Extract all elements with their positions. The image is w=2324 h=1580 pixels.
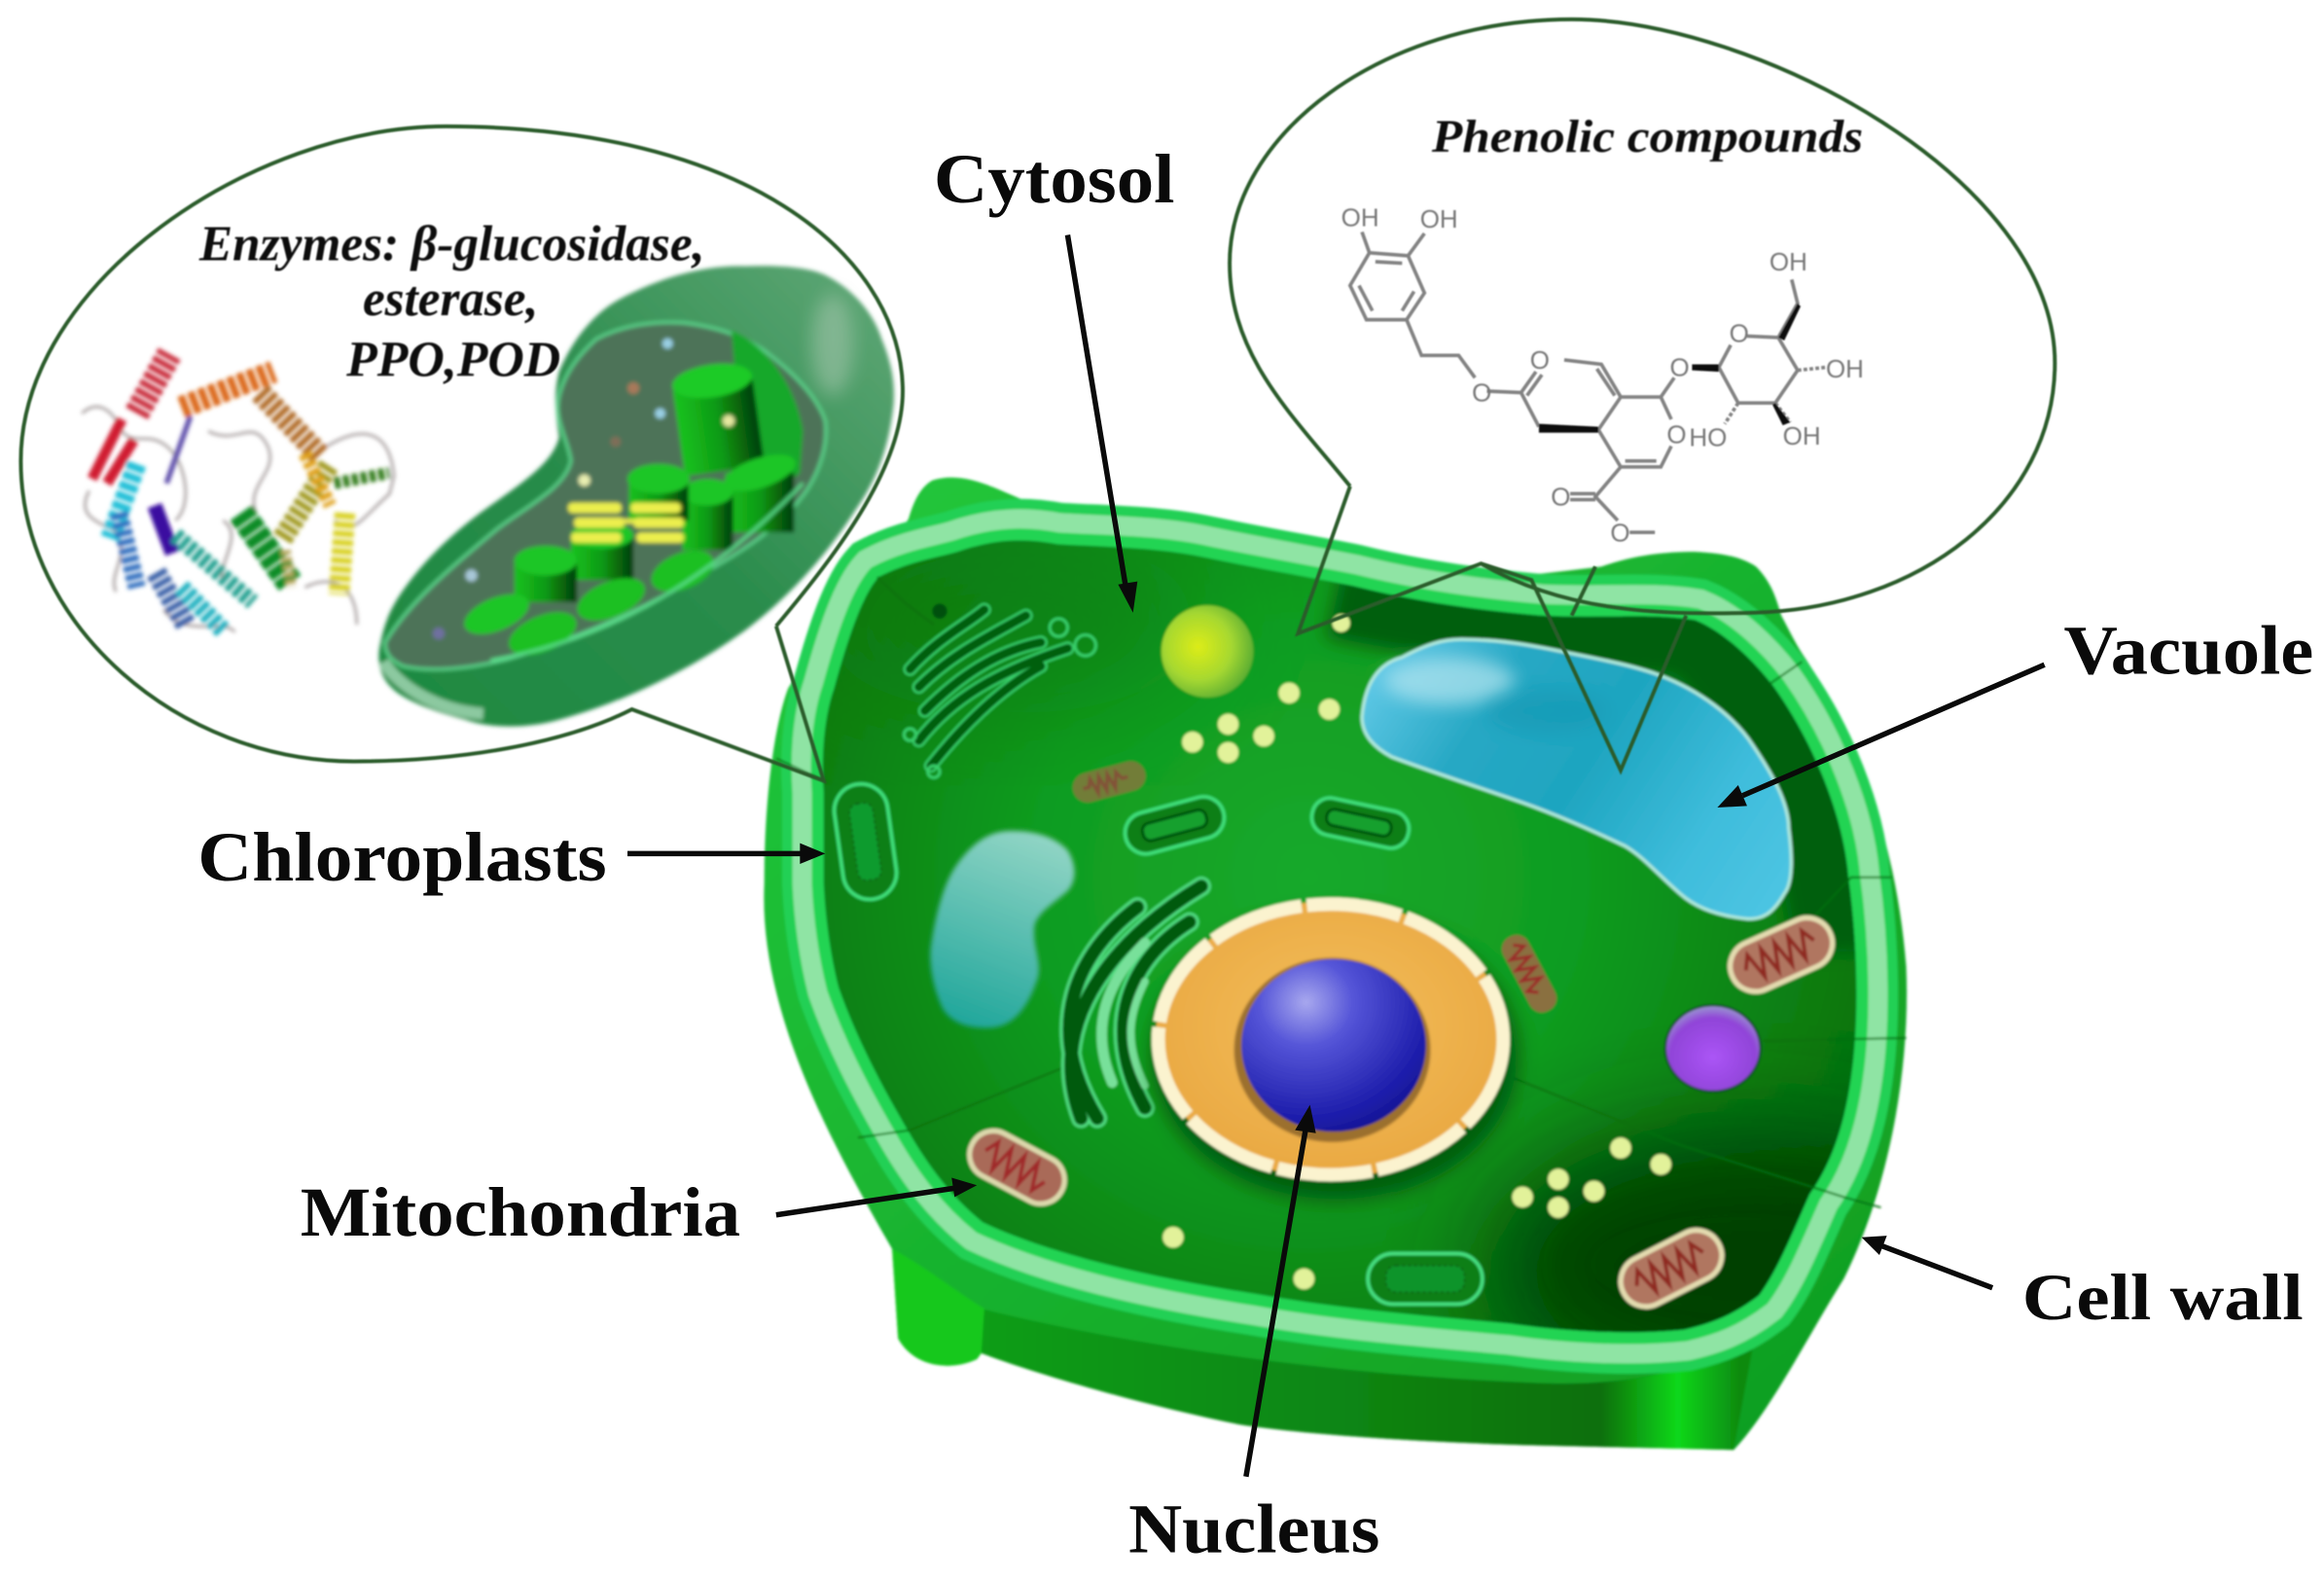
phenolic molecule structure (1341, 202, 1864, 547)
cytoplasm (823, 541, 1856, 1332)
molecule atom labels: O (1530, 345, 1550, 375)
molecule atom labels: OH (1420, 204, 1458, 233)
molecule atom labels: O (1669, 353, 1690, 382)
arrow: Nucleus (1246, 1105, 1316, 1477)
enzymes caption: PPO,POD (345, 333, 560, 388)
phenolic compounds caption: Phenolic compounds (1431, 112, 1863, 162)
chloroplast organelles (831, 780, 1483, 1304)
arrow: Chloroplasts (627, 844, 825, 864)
molecule atom labels: O (1610, 518, 1630, 547)
chloroplast bottom (1368, 1254, 1483, 1304)
helix olive (282, 464, 330, 538)
sheet red (92, 419, 134, 484)
large vacuole (1362, 639, 1791, 919)
chloroplast envelope (378, 266, 894, 727)
yellow thylakoid connections (568, 503, 684, 543)
wall division lines (776, 577, 1906, 1207)
molecule atom labels: O (1551, 483, 1570, 512)
chloroplast highlight (812, 295, 853, 396)
molecule atom labels (1341, 202, 1864, 547)
cytoplasm shading (818, 535, 1992, 1398)
cell wall band pale (823, 541, 1856, 1332)
helix turquoise (181, 588, 223, 630)
nucleus (1151, 901, 1520, 1202)
purple vesicle (1665, 1005, 1761, 1092)
mitochondrion upper left (1069, 758, 1149, 806)
helix dark green (241, 513, 290, 583)
arrow: Cytosol (1067, 234, 1137, 613)
molecule atom labels: OH (1783, 421, 1821, 450)
left foot of cell wall (892, 1249, 984, 1366)
chloroplast pale lower rim (383, 662, 483, 714)
helix cyan (110, 464, 137, 538)
helix teal blue (156, 572, 186, 625)
helix orange (181, 372, 273, 408)
small vacuole (931, 831, 1074, 1027)
molecule atom labels: OH (1826, 354, 1864, 383)
green sphere organelle (1162, 605, 1254, 698)
helix teal (175, 535, 253, 602)
mitochondrion lower left (961, 1123, 1073, 1212)
callout bubble: phenolic compounds (1230, 19, 2055, 771)
label: Vacuole: Vacuole (2064, 611, 2313, 689)
arrow: Cell wall (1862, 1236, 1992, 1288)
chloroplast top middle (1121, 792, 1229, 858)
callout bubble: enzymes (20, 126, 903, 780)
helix blue (119, 513, 137, 588)
arrow: Vacuole (1717, 664, 2045, 808)
plant cell diagram (764, 478, 1992, 1450)
label: Nucleus: Nucleus (1128, 1490, 1379, 1568)
protein ribbon structure (82, 354, 394, 632)
vesicle dots (1162, 614, 1671, 1289)
cell wall band outer (823, 541, 1856, 1332)
chloroplast enlargement illustration (378, 266, 894, 727)
molecule atom labels: O (1666, 419, 1687, 449)
chloroplast top right (1308, 795, 1412, 851)
helix indigo (155, 506, 172, 554)
molecule atom labels: O (1730, 319, 1749, 348)
label: Chloroplasts: Chloroplasts (197, 818, 607, 896)
molecule bonds (1350, 232, 1826, 532)
nucleolus (1241, 959, 1426, 1131)
mitochondria organelles (961, 758, 1841, 1315)
sheet purple (166, 416, 191, 484)
molecule atom labels: OH (1341, 202, 1379, 232)
label: Cell wall: Cell wall (2022, 1261, 2304, 1334)
helix tan (285, 551, 292, 588)
mitochondrion bottom right (1612, 1222, 1731, 1315)
helix gold (304, 453, 330, 506)
chloroplast left (831, 780, 900, 903)
cell wall band inner (823, 541, 1856, 1332)
label: Mitochondria: Mitochondria (301, 1173, 740, 1251)
molecule atom labels: HO (1689, 423, 1727, 452)
enzymes caption (198, 216, 704, 388)
cell base side wall (982, 1309, 1755, 1450)
molecule atom labels: O (1472, 378, 1491, 408)
molecule atom labels: OH (1770, 247, 1807, 276)
protein loops (82, 407, 394, 632)
chloroplast stroma (385, 322, 826, 669)
golgi apparatus upper (904, 604, 1095, 777)
chloroplast grana (459, 330, 803, 664)
helix brown (260, 393, 320, 455)
golgi apparatus near nucleus (1069, 886, 1201, 1118)
helix red (137, 354, 169, 413)
helix green (335, 473, 389, 484)
enzymes caption: Enzymes: β-glucosidase, (198, 216, 704, 271)
cell outer body (764, 478, 1907, 1450)
enzymes caption: esterase, (363, 271, 538, 327)
molecule wedge bonds (1539, 304, 1801, 433)
mitochondrion center right (1497, 930, 1561, 1017)
helix yellow (339, 513, 345, 594)
mitochondrion right (1722, 910, 1841, 999)
stroma particles (433, 339, 734, 639)
arrow: Mitochondria (776, 1178, 977, 1215)
label: Cytosol: Cytosol (934, 140, 1174, 218)
